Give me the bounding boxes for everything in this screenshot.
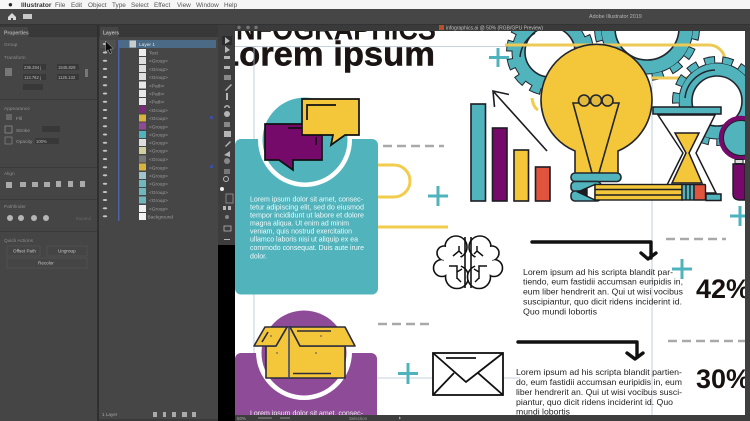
gear top left <box>506 31 594 95</box>
card body text: tetur adipiscing elit, sed do eiusmod <box>250 202 364 212</box>
menu bar: Help <box>224 2 238 9</box>
menu bar: View <box>177 2 191 9</box>
text block: second paragraph: do, eum fastidii accumsan euripidis in, eum <box>516 377 682 387</box>
text block: second paragraph: mundi lobortis <box>516 406 570 416</box>
panel: toolbar <box>218 25 235 245</box>
decorative yellow connectors <box>378 98 539 228</box>
panel: layers: <Group> <box>149 190 168 196</box>
document tab bar: infographics.ai @ 50% (RGB/GPU Preview) <box>446 26 543 32</box>
bar chart <box>471 104 550 201</box>
menu bar: Type <box>112 2 126 9</box>
icon: plus signs <box>398 48 750 384</box>
panel: properties: Align <box>4 171 15 177</box>
gear right <box>676 60 750 142</box>
black workspace gutter <box>218 245 235 421</box>
menu bar: Edit <box>71 2 82 9</box>
icon: envelope <box>433 353 503 395</box>
yellow connector over gears <box>505 45 725 78</box>
circle badge <box>258 93 352 187</box>
status bar: 50% <box>237 416 246 421</box>
panel: layers: <Group> <box>149 149 168 155</box>
dashed separators <box>378 146 745 341</box>
panel: layers: <Path> <box>149 92 165 98</box>
menu bar: Window <box>196 2 219 9</box>
illustration: pencil <box>578 184 706 200</box>
arrow: to second paragraph <box>518 342 643 359</box>
gear top centre <box>594 31 700 81</box>
panel: layers: <Group> <box>149 206 168 212</box>
text block: first paragraph: tiendo, eum fastidii accumsan euripidis in, <box>523 276 683 286</box>
text block: second paragraph: liber hendrerit an. Qui ut wisi vocibus susci- <box>516 387 682 397</box>
panel: properties: Appearance <box>4 106 30 112</box>
panel: properties: Stroke <box>16 128 30 134</box>
panel: properties: Recolor <box>38 260 54 266</box>
panel: purple text card <box>235 310 377 415</box>
panel: layers: <Group> <box>149 116 168 122</box>
icon: cardboard box <box>254 327 355 378</box>
stat: 30%: 30% <box>696 364 750 394</box>
text block: first paragraph: Quo mundi lobortis <box>523 306 597 316</box>
panel: layers: <Group> <box>149 141 168 147</box>
panel: layers: <Group> <box>149 67 168 73</box>
card body text: Lorem ipsum dolor sit amet, consec- <box>250 194 364 204</box>
text block: second paragraph <box>516 367 682 416</box>
panel: layers: <Group> <box>149 59 168 65</box>
left hemisphere <box>434 236 468 288</box>
panel: layers: <Path> <box>149 100 165 106</box>
text block: first paragraph <box>523 267 683 316</box>
panel: properties: Properties <box>4 30 29 36</box>
panel: layers: Layers <box>103 30 119 36</box>
right hemisphere <box>468 236 502 288</box>
heading: infographics title: Lorem ipsum <box>218 36 435 74</box>
status bar <box>235 415 750 421</box>
card background <box>235 353 377 421</box>
card body text: veniam, quis nostrud exercitation <box>250 226 352 236</box>
application title bar <box>0 9 750 25</box>
panel: properties: Quick Actions <box>4 238 34 244</box>
icon: chat bubbles <box>265 99 359 170</box>
panel: layers: <Group> <box>149 182 168 188</box>
panel: properties: Offset Path <box>13 248 36 254</box>
panel: properties: Pathfinder <box>4 204 26 210</box>
arrow: growth <box>493 91 547 151</box>
text block: first paragraph: Lorem ipsum ad his scripta blandit par- <box>523 267 673 277</box>
icon: brain <box>434 236 502 288</box>
menu bar: Effect <box>154 2 170 9</box>
card background <box>235 139 378 294</box>
panel: layers: <Group> <box>149 157 168 163</box>
panel: layers: <Path> <box>149 83 165 89</box>
panel: layers: <Group> <box>149 108 168 114</box>
illustration: hourglass <box>653 107 721 200</box>
panel: layers: Layer 1 <box>139 42 155 48</box>
document tab bar <box>235 25 750 32</box>
text block: first paragraph: eum liber hendrerit an. Qui ut wisi vocibus <box>523 286 683 296</box>
panel: layers: 1 Layer <box>102 412 118 417</box>
panel: properties: 236.284 j <box>24 65 41 70</box>
menu bar: Select <box>131 2 149 9</box>
panel: properties: Group <box>4 42 18 48</box>
card body text: dolor. <box>250 252 267 260</box>
panel: layers: Text <box>149 50 158 56</box>
menu bar: ● <box>8 0 13 9</box>
panel: properties: Transform <box>4 55 26 61</box>
panel: teal text card <box>235 93 378 294</box>
card body text: magna aliqua. Ut enim ad minim <box>250 218 349 228</box>
status bar: Selection <box>349 416 368 421</box>
text block: first paragraph: suscipiantur, quo dicit ridens inciderint id. <box>523 296 682 306</box>
guides <box>235 46 660 415</box>
text block: second paragraph: Lorem ipsum ad his scripta blandit partien- <box>516 367 682 377</box>
menu bar: Illustrator <box>21 2 52 9</box>
heading: infographics title: NFOGRAPHICS <box>236 12 436 46</box>
panel: layers: <Group> <box>149 132 168 138</box>
panel: layers: <Group> <box>149 198 168 204</box>
panel: layers: <Group> <box>149 124 168 130</box>
panel: properties: 113.762 j <box>24 75 41 80</box>
panel: properties: 1545.829 <box>58 65 76 70</box>
panel: properties <box>0 25 99 421</box>
application title bar: Adobe Illustrator 2019 <box>589 14 642 20</box>
card body text: commodo consequat. Duis aute irure <box>250 243 364 252</box>
illustration: magnifier <box>721 118 750 200</box>
panel: layers: <Group> <box>149 173 168 179</box>
panel: properties: Expand <box>76 216 91 221</box>
right scrollbar <box>745 31 750 421</box>
card body text: Lorem ipsum dolor sit amet, consec- <box>250 408 364 418</box>
illustration: gears <box>505 31 745 146</box>
card body text <box>250 194 364 260</box>
circle badge <box>256 304 352 400</box>
panel: layers: Background <box>148 214 173 220</box>
illustration: light bulb <box>541 44 652 201</box>
panel: properties: 1125.132 <box>58 75 76 80</box>
menu bar: File <box>55 2 66 9</box>
panel: layers: <Group> <box>149 75 168 81</box>
menu bar <box>0 0 750 9</box>
panel: properties: 100% <box>36 139 47 144</box>
arrow: to first paragraph <box>532 242 656 259</box>
card body text: tempor incididunt ut labore et dolore <box>250 210 364 220</box>
panel: properties: Opacity <box>16 139 33 145</box>
panel: layers <box>99 25 218 421</box>
artboard canvas <box>235 31 745 415</box>
stat: 42%: 42% <box>696 274 750 304</box>
card body text: ullamco laboris nisi ut aliquip ex ea <box>250 234 359 244</box>
panel: properties: Fill <box>16 116 22 122</box>
text block: second paragraph: piantur, quo dicit ridens inciderint id. Quo <box>516 397 673 407</box>
menu bar: Object <box>88 2 107 9</box>
icon: mouse cursor <box>106 41 114 54</box>
panel: layers: <Group> <box>149 165 168 171</box>
panel: properties: Ungroup <box>58 248 76 254</box>
